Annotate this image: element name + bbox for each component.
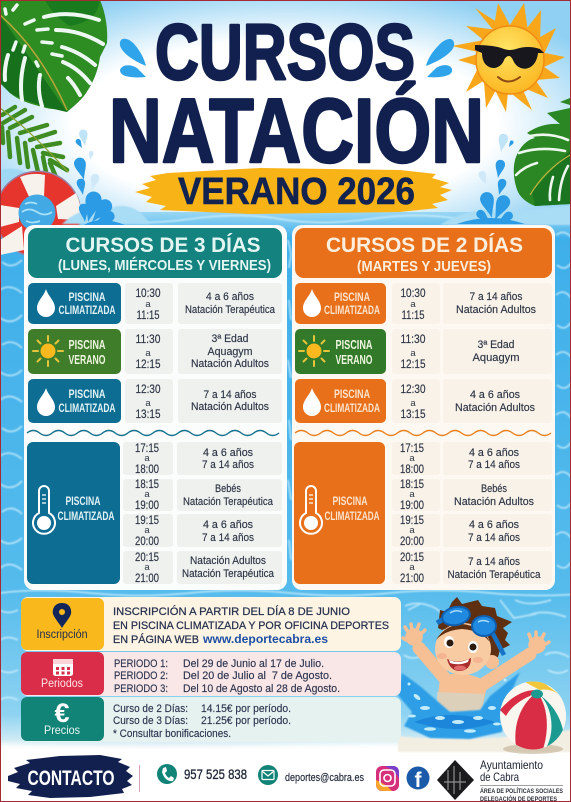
badge: piscina climatizada: [295, 283, 386, 324]
monstera leaf top left: [0, 0, 107, 112]
afternoon times: 18:00: [135, 464, 159, 476]
footer: [8, 755, 564, 802]
afternoon times: 18:15: [135, 479, 159, 491]
badge: piscina climatizada: CLIMATIZADA: [58, 401, 116, 415]
row: precios: 14.15€ por período.: [201, 703, 291, 715]
beach ball: [500, 680, 570, 754]
badge: piscina climatizada: PISCINA: [68, 387, 106, 401]
heading: cursos de 3 días: (LUNES, MIÉRCOLES Y VIERNES): [58, 257, 271, 274]
afternoon times: 19:15: [400, 515, 424, 527]
afternoon times: 18:00: [400, 464, 424, 476]
afternoon activities: Natación Terapéutica: [183, 496, 274, 508]
afternoon activities: 4 a 6 años: [203, 519, 253, 531]
icon: facebook: f: [414, 769, 422, 792]
afternoon times: 20:15: [400, 552, 424, 564]
morning times: a: [410, 398, 416, 409]
row: precios: Precios: [44, 723, 80, 737]
morning activities: Natación Adultos: [455, 402, 535, 414]
badge: piscina climatizada tarde: [27, 442, 120, 584]
phone: 957 525 838: [184, 766, 247, 782]
badge: piscina climatizada: PISCINA: [334, 387, 370, 401]
splash: [398, 672, 520, 739]
ear: [485, 655, 499, 669]
arms: [419, 648, 530, 689]
row: periodos: PERIODO 3:: [114, 683, 168, 695]
afternoon times: a: [409, 489, 415, 500]
morning activities: Natación Adultos: [191, 358, 269, 370]
left water patch: [0, 169, 60, 225]
row: periodos: Del 10 de Agosto al 28 de Agosto.: [183, 683, 340, 695]
morning times: 11:15: [402, 310, 424, 322]
afternoon activities: Natación Adultos: [454, 496, 534, 508]
heading: cursos de 2 días: CURSOS DE 2 DÍAS: [326, 234, 523, 257]
hands: [403, 624, 549, 652]
morning activities: Aquagym: [472, 352, 520, 364]
morning activities: 3ª Edad: [212, 333, 248, 345]
afternoon activities: [448, 447, 541, 581]
afternoon activities: Bebés: [481, 483, 507, 495]
afternoon times: 20:00: [135, 536, 159, 548]
morning schedule cells: [392, 283, 552, 423]
badge: piscina climatizada tarde: CLIMATIZADA: [324, 509, 380, 523]
icon: instagram: [376, 766, 399, 791]
row: inscripción: INSCRIPCIÓN A PARTIR DEL DÍA 8 DE JUNIO: [113, 605, 350, 618]
morning activities: [455, 291, 536, 414]
icon: calendar: [53, 659, 73, 676]
row: periodos: Periodos: [41, 678, 83, 690]
morning times: 11:15: [136, 310, 160, 322]
morning activities: 3ª Edad: [478, 339, 514, 351]
afternoon times: 21:00: [135, 573, 159, 585]
row: precios: [21, 697, 401, 742]
row: periodos: PERIODO 2:: [114, 670, 168, 682]
morning times: 12:15: [136, 359, 160, 371]
afternoon activities: 7 a 14 años: [468, 459, 520, 471]
morning times: 13:15: [136, 409, 160, 421]
afternoon activities: 7 a 14 años: [202, 459, 254, 471]
title: NATACIÓN: NATACIÓN: [109, 81, 484, 182]
afternoon activities: [182, 447, 275, 580]
afternoon activities: Natación Adultos: [190, 555, 266, 567]
badge: piscina climatizada: CLIMATIZADA: [58, 303, 116, 317]
morning times: a: [410, 348, 416, 359]
badge: piscina climatizada tarde: PISCINA: [66, 494, 101, 508]
logo ayuntamiento de cabra: Ayuntamiento: [480, 758, 543, 772]
morning activities: 7 a 14 años: [204, 389, 257, 401]
row: periodos: Del 20 de Julio al 7 de Agosto.: [183, 670, 332, 682]
afternoon times: a: [144, 453, 150, 464]
morning activities: 4 a 6 años: [206, 291, 254, 303]
row: inscripción: EN PISCINA CLIMATIZADA Y POR OFICINA DEPORTES: [113, 620, 389, 632]
row: periodos: Del 29 de Junio al 17 de Julio.: [183, 658, 324, 670]
email: [258, 765, 364, 785]
afternoon activities: Natación Terapéutica: [448, 569, 541, 581]
sand under boy: [398, 730, 571, 752]
icon: map pin: [53, 603, 71, 628]
morning times: 13:15: [400, 409, 426, 421]
afternoon times: 20:15: [135, 552, 159, 564]
afternoon times: a: [144, 525, 150, 536]
afternoon times: a: [409, 453, 415, 464]
afternoon times: 18:15: [400, 479, 424, 491]
afternoon times: 19:15: [135, 515, 159, 527]
afternoon activities: 4 a 6 años: [469, 447, 519, 459]
logo ayuntamiento de cabra: de Cabra: [480, 770, 519, 784]
email: deportes@cabra.es: [285, 772, 364, 784]
badge: piscina verano: VERANO: [68, 352, 106, 367]
morning activities: Natación Adultos: [456, 304, 536, 316]
panel: cursos de 2 días: [292, 225, 555, 590]
morning times: [400, 288, 426, 421]
badge: piscina verano: [28, 329, 121, 374]
row: inscripción: Inscripción: [36, 629, 88, 641]
logo ayuntamiento de cabra: [437, 758, 564, 802]
monstera leaf right: [514, 98, 570, 206]
row: periodos: [21, 652, 401, 696]
row: precios: * Consultar bonificaciones.: [113, 728, 231, 740]
afternoon times: 17:15: [400, 443, 424, 455]
goggles: [437, 604, 504, 655]
afternoon activities: 7 a 14 años: [468, 556, 520, 568]
badge: piscina climatizada: [295, 379, 386, 423]
icon: facebook: [406, 766, 430, 792]
sun with sunglasses: [452, 3, 565, 112]
afternoon times: a: [409, 562, 415, 573]
afternoon times: [135, 443, 159, 585]
row: precios: 21.25€ por período.: [201, 715, 291, 727]
morning times: 10:30: [400, 288, 426, 300]
splash left: [62, 129, 150, 228]
palm frond left: [0, 107, 68, 177]
badge: piscina climatizada: [28, 283, 121, 324]
afternoon activities: 7 a 14 años: [468, 532, 520, 544]
badge: piscina verano: PISCINA: [68, 337, 106, 352]
afternoon times: 19:00: [400, 500, 424, 512]
morning times: 10:30: [136, 288, 160, 300]
splash right: [440, 133, 571, 226]
life ring: [0, 170, 82, 258]
afternoon activities: Natación Terapéutica: [182, 568, 275, 580]
contacto brush label: CONTACTO: [28, 767, 114, 790]
morning times: a: [145, 299, 151, 310]
afternoon times: a: [144, 489, 150, 500]
heading: cursos de 3 días: [28, 228, 282, 278]
badge: piscina climatizada: PISCINA: [334, 290, 370, 304]
afternoon schedule cells: [123, 442, 282, 584]
phone: [157, 764, 247, 784]
badge: piscina verano: PISCINA: [336, 337, 373, 352]
title: CURSOS: CURSOS: [155, 7, 415, 96]
afternoon times: 17:15: [135, 443, 159, 455]
badge: piscina climatizada tarde: [294, 442, 385, 584]
morning times: 11:30: [400, 334, 426, 346]
badge: piscina climatizada: PISCINA: [68, 290, 106, 304]
afternoon activities: 4 a 6 años: [469, 519, 519, 531]
afternoon activities: 7 a 14 años: [202, 532, 254, 544]
badge: piscina climatizada tarde: PISCINA: [332, 494, 368, 508]
face: [437, 636, 483, 671]
heading: cursos de 2 días: (MARTES Y JUEVES): [357, 258, 491, 275]
afternoon activities: Bebés: [215, 483, 241, 495]
panel: información: [21, 597, 401, 742]
afternoon times: 19:00: [135, 500, 159, 512]
badge: piscina verano: VERANO: [336, 352, 372, 367]
heading: cursos de 3 días: CURSOS DE 3 DÍAS: [66, 234, 260, 257]
torso: [437, 673, 488, 712]
hair: [438, 597, 512, 658]
contacto brush label: [8, 755, 133, 798]
morning times: 12:30: [400, 384, 426, 396]
panel: cursos de 3 días: [24, 225, 287, 590]
row: periodos: PERIODO 1:: [114, 658, 168, 670]
morning times: [136, 288, 160, 421]
row: precios: Curso de 3 Días:: [113, 715, 188, 727]
row: inscripción: www.deportecabra.es: [202, 634, 328, 646]
row: precios: €: [54, 698, 70, 728]
morning activities: Natación Terapéutica: [185, 304, 276, 316]
morning schedule cells: [125, 283, 282, 423]
morning activities: Aquagym: [208, 346, 252, 358]
morning times: a: [145, 348, 151, 359]
badge: piscina verano: [295, 329, 386, 374]
afternoon times: a: [144, 562, 150, 573]
morning activities: Natación Adultos: [191, 401, 269, 413]
afternoon times: 20:00: [400, 536, 424, 548]
afternoon schedule cells: [392, 442, 552, 584]
badge: piscina climatizada: CLIMATIZADA: [324, 401, 380, 415]
afternoon times: 21:00: [400, 573, 424, 585]
water drops beside title: [120, 39, 454, 77]
morning times: a: [410, 299, 416, 310]
morning times: 11:30: [136, 334, 160, 346]
afternoon times: [400, 443, 424, 585]
morning activities: [185, 291, 276, 413]
subtitle banner: VERANO 2026: VERANO 2026: [178, 171, 415, 213]
afternoon activities: 4 a 6 años: [203, 447, 253, 459]
morning activities: 7 a 14 años: [470, 291, 523, 303]
heading: cursos de 2 días: [295, 228, 552, 278]
morning activities: 4 a 6 años: [470, 389, 520, 401]
row: inscripción: [21, 597, 401, 651]
morning times: 12:30: [136, 384, 160, 396]
badge: piscina climatizada: CLIMATIZADA: [324, 303, 380, 317]
row: inscripción: EN PÁGINA WEB: [113, 633, 199, 646]
afternoon times: a: [409, 525, 415, 536]
row: precios: Curso de 2 Días:: [113, 703, 188, 715]
head: [435, 623, 491, 675]
morning times: 12:15: [400, 359, 426, 371]
badge: piscina climatizada tarde: CLIMATIZADA: [58, 509, 115, 523]
morning times: a: [145, 398, 151, 409]
badge: piscina climatizada: [28, 379, 121, 423]
boy swimming: [398, 597, 549, 739]
